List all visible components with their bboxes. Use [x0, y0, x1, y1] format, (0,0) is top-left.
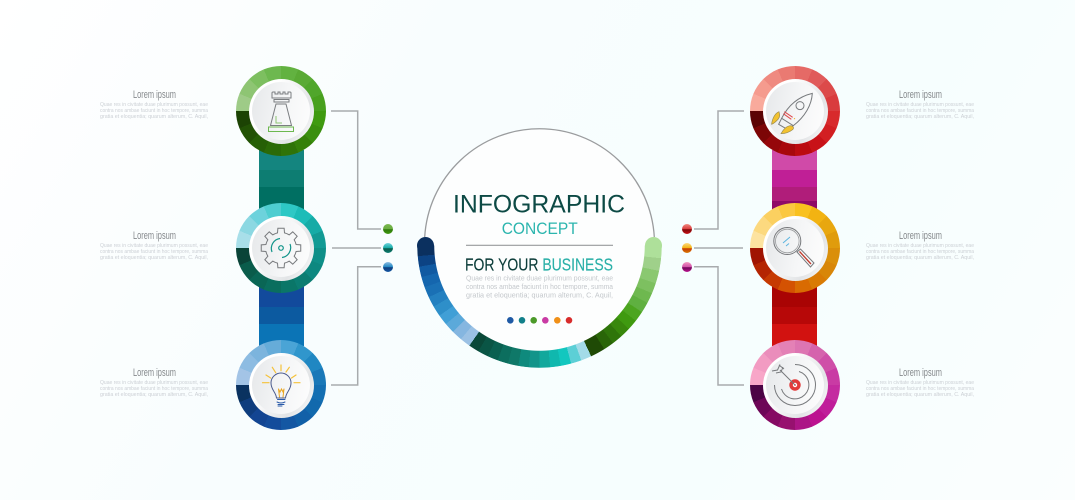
text block: right 3: Lorem ipsum: [899, 367, 942, 379]
central paragraph: [466, 274, 614, 300]
icon: magnifying glass: [774, 228, 814, 267]
title: infographic: INFOGRAPHIC: [453, 191, 625, 219]
text block: left 3: [100, 367, 209, 398]
text block: left 2: contra nos ambae faciunt in hoc tempore, summa: [100, 249, 209, 255]
text block: right 1: [866, 89, 975, 120]
connector: pink ring to dot: [694, 267, 744, 385]
bar: blue connector between second and third left rings: [258, 286, 304, 346]
connector: blue ring to dot: [331, 267, 381, 385]
central thin circle outline: [425, 129, 654, 237]
central white disc: [424, 128, 654, 358]
bar: red connector between second and third right rings: [772, 286, 817, 346]
text block: left 1: Lorem ipsum: [133, 89, 176, 101]
ring: pink: [750, 340, 840, 430]
icon: rocket: [772, 93, 812, 134]
connector: yellow ring to dot: [694, 247, 743, 249]
ring: yellow: [750, 203, 840, 293]
icon: chess rook: [268, 92, 294, 132]
bar: magenta connector between first and second right rings: [772, 150, 817, 212]
central paragraph: contra nos ambae faciunt in hoc tempore, summa: [466, 282, 614, 291]
text block: left 2: gratia et eloquentia; quarum alterum, C. Aquil,: [100, 255, 208, 261]
text block: right 2: Lorem ipsum: [899, 230, 942, 242]
dot: teal: [383, 243, 393, 253]
central paragraph: Quae res in civitate duae plurimum possunt, eae: [466, 274, 613, 282]
ring: blue: [236, 340, 326, 430]
icon: target with arrow: [772, 364, 816, 406]
ring: green: [236, 66, 326, 156]
row of colored dots: [507, 317, 572, 324]
arc end cap: light green: [645, 237, 662, 254]
ring: red: [750, 66, 840, 156]
text block: right 1: gratia et eloquentia; quarum alterum, C. Aquil,: [866, 114, 974, 120]
central paragraph: gratia et eloquentia; quarum alterum, C. Aquil,: [466, 290, 613, 300]
icon: light bulb: [262, 365, 300, 406]
divider line: [466, 245, 613, 246]
text block: right 3: contra nos ambae faciunt in hoc tempore, summa: [866, 386, 975, 392]
dot: blue: [383, 262, 393, 272]
text block: left 2: [100, 230, 209, 261]
heading: for your business: FOR YOUR BUSINESS: [465, 255, 613, 275]
dot: green: [383, 224, 393, 234]
text block: left 1: [100, 89, 209, 120]
central segmented arc: [417, 246, 662, 368]
text block: left 3: Lorem ipsum: [133, 367, 176, 379]
text block: left 1: contra nos ambae faciunt in hoc tempore, summa: [100, 108, 209, 114]
text block: left 3: gratia et eloquentia; quarum alterum, C. Aquil,: [100, 392, 208, 398]
text block: left 3: Quae res in civitate duae plurimum possunt, eae: [100, 380, 208, 386]
text block: right 3: gratia et eloquentia; quarum alterum, C. Aquil,: [866, 392, 974, 398]
text block: right 2: Quae res in civitate duae plurimum possunt, eae: [866, 243, 974, 249]
dot: yellow: [682, 243, 692, 253]
connector: teal ring to dot: [332, 247, 381, 249]
text block: right 2: gratia et eloquentia; quarum alterum, C. Aquil,: [866, 255, 974, 261]
text block: left 1: gratia et eloquentia; quarum alterum, C. Aquil,: [100, 114, 208, 120]
icon: gear: [261, 228, 301, 268]
text block: left 2: Lorem ipsum: [133, 230, 176, 242]
text block: right 2: [866, 230, 975, 261]
text block: right 1: Lorem ipsum: [899, 89, 942, 101]
text block: right 2: contra nos ambae faciunt in hoc tempore, summa: [866, 249, 975, 255]
dot: pink: [682, 262, 692, 272]
text block: right 3: Quae res in civitate duae plurimum possunt, eae: [866, 380, 974, 386]
text block: left 3: contra nos ambae faciunt in hoc tempore, summa: [100, 386, 209, 392]
text block: right 1: contra nos ambae faciunt in hoc tempore, summa: [866, 108, 975, 114]
bar: teal connector between first and second left rings: [258, 150, 304, 212]
connector: green ring to dot: [331, 111, 381, 229]
dot: red: [682, 224, 692, 234]
text block: right 1: Quae res in civitate duae plurimum possunt, eae: [866, 102, 974, 108]
text block: right 3: [866, 367, 975, 398]
connector: red ring to dot: [694, 111, 744, 229]
text block: left 2: Quae res in civitate duae plurimum possunt, eae: [100, 243, 208, 249]
text block: left 1: Quae res in civitate duae plurimum possunt, eae: [100, 102, 208, 108]
ring: teal: [236, 203, 326, 293]
subtitle: concept: CONCEPT: [502, 220, 578, 238]
arc end cap: navy: [417, 237, 434, 254]
